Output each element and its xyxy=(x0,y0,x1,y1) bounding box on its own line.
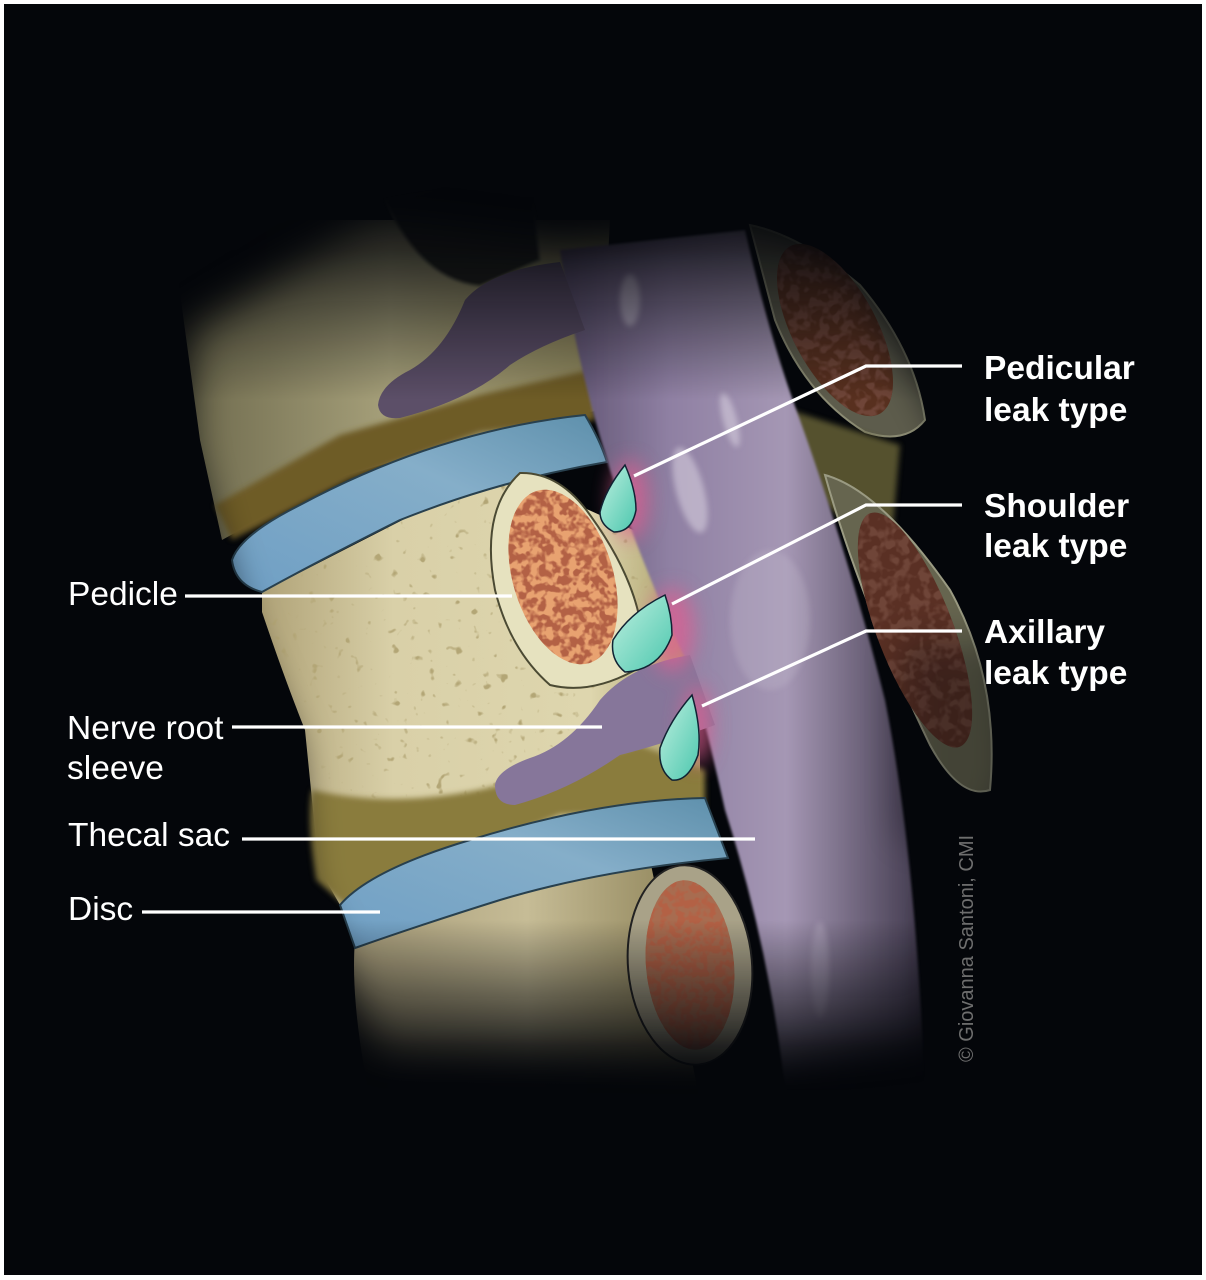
upper vertebra lower rim xyxy=(215,370,596,540)
label: disc: Disc xyxy=(68,891,133,928)
middle vertebra pits xyxy=(282,486,638,798)
label: sleeve: sleeve xyxy=(67,750,164,787)
disc line xyxy=(142,910,380,914)
leak glow xyxy=(612,460,711,765)
label: thecal sac: Thecal sac xyxy=(68,817,230,854)
pedicle line xyxy=(185,594,512,598)
pedicular leak xyxy=(600,465,636,532)
label: shoulder: Shoulder xyxy=(984,488,1129,525)
pedicular line xyxy=(634,366,962,476)
lower pedicle outer xyxy=(626,864,754,1064)
sac highlight streaks xyxy=(620,274,829,1018)
axillary line xyxy=(702,631,962,706)
right posterior element upper xyxy=(750,225,925,436)
illustration: vertebrae and thecal sac xyxy=(184,220,993,1070)
lower vertebra body xyxy=(354,868,692,1069)
middle vertebra body xyxy=(262,470,700,905)
leader lines xyxy=(142,366,962,912)
credit: © Giovanna Santoni, CMI xyxy=(956,835,978,1062)
lower pedicle porous bone xyxy=(646,880,734,1050)
middle pedicle outer xyxy=(491,473,640,688)
label: axillary: Axillary xyxy=(984,614,1105,651)
label: shoulder leak type: leak type xyxy=(984,528,1127,565)
thecal sac xyxy=(560,230,925,1090)
thecal sac line xyxy=(242,837,755,841)
axillary leak xyxy=(660,695,699,780)
middle vertebra olive lower rim xyxy=(310,745,705,905)
upper disc xyxy=(232,415,607,592)
upper vertebra body xyxy=(170,220,610,540)
shoulder line xyxy=(672,505,962,604)
lower nerve root sleeve xyxy=(495,655,715,805)
label: pedicular leak type: leak type xyxy=(984,392,1127,429)
left labels xyxy=(67,576,230,928)
right posterior element lower xyxy=(825,475,992,792)
lower disc xyxy=(340,798,728,948)
nerve root line xyxy=(232,725,602,729)
right posterior bone upper xyxy=(777,244,893,416)
label: axillary leak type: leak type xyxy=(984,655,1127,692)
upper nerve root sleeve xyxy=(378,262,585,418)
right labels xyxy=(984,350,1135,692)
right connector xyxy=(796,409,903,522)
label: pedicular: Pedicular xyxy=(984,350,1135,387)
middle pedicle porous bone xyxy=(508,490,618,664)
label: pedicle: Pedicle xyxy=(68,576,178,613)
shoulder leak xyxy=(612,595,672,672)
upper facet outline xyxy=(396,220,540,288)
label: nerve root: Nerve root xyxy=(67,710,224,747)
right posterior bone lower xyxy=(858,512,972,748)
